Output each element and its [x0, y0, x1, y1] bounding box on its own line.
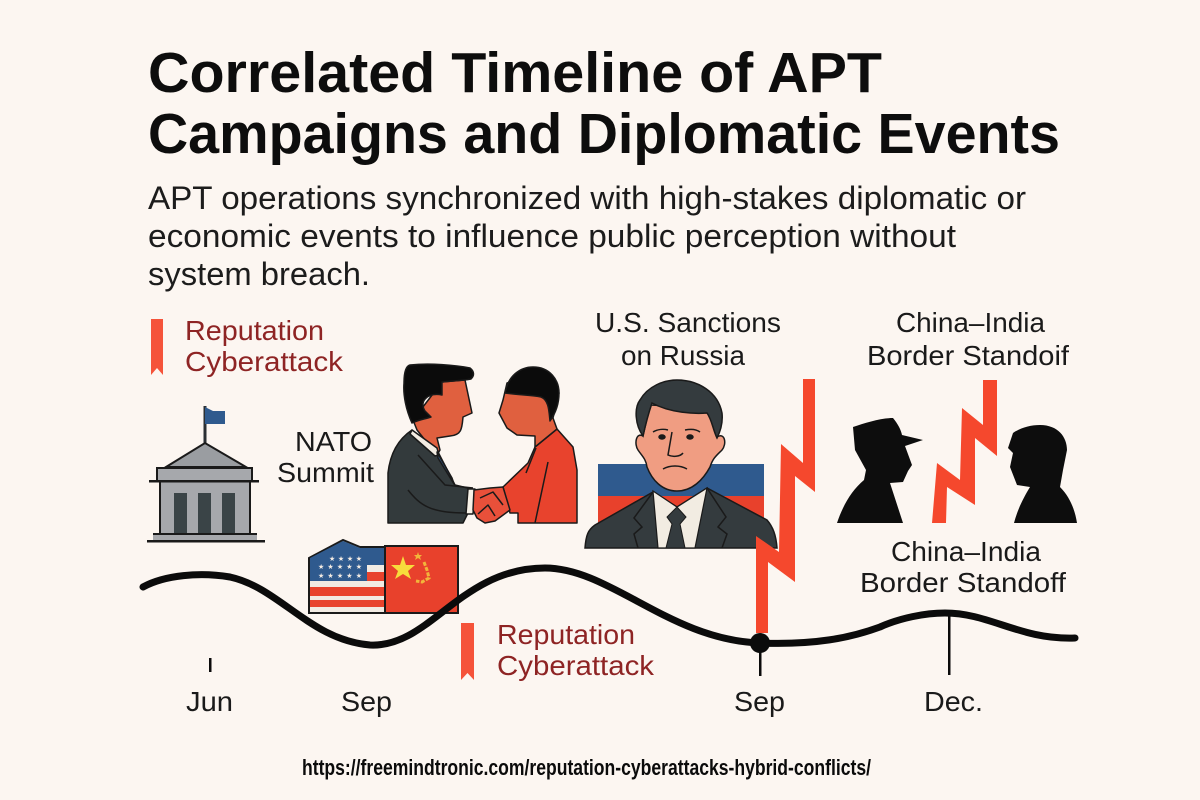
marker label: Reputation: [497, 619, 635, 650]
marker label: [497, 619, 655, 681]
hands: [473, 487, 510, 523]
left figure: [388, 364, 476, 523]
timeline month labels: [186, 686, 983, 717]
title: Campaigns and Diplomatic Events: [148, 102, 1060, 166]
label: China-India Border Standoff: Border Standoff: [860, 567, 1066, 598]
label: U.S. Sanctions on Russia: on Russia: [621, 340, 745, 371]
Russian flag: [598, 464, 764, 523]
subtitle: economic events to influence public perception without: [148, 218, 956, 254]
timeline month labels: Dec.: [924, 686, 983, 717]
icon: red ribbon: [151, 319, 163, 375]
icon: US and China flags: [309, 540, 458, 613]
legend: reputation cyberattack: [151, 315, 344, 377]
label: China-India Border Standoif: China–India: [896, 307, 1045, 338]
left soldier silhouette: [837, 418, 923, 523]
timeline markers: [209, 614, 950, 676]
marker label: Cyberattack: [497, 650, 655, 681]
US flag: ★ ★ ★ ★: [329, 555, 362, 563]
right soldier silhouette: [1008, 425, 1077, 523]
timeline month labels: Sep: [734, 686, 785, 717]
face: [636, 405, 725, 491]
icon: government building: [147, 406, 265, 542]
label: China-India Border Standoif: [867, 307, 1069, 371]
label: U.S. Sanctions on Russia: [595, 307, 781, 371]
source url: https://freemindtronic.com/reputation-cyberattacks-hybrid-conflicts/: [302, 755, 871, 780]
label: China-India Border Standoff: China–India: [891, 536, 1041, 567]
US flag: [309, 540, 385, 613]
timeline month labels: Jun: [186, 686, 233, 717]
subtitle: [148, 180, 1026, 292]
icon: red ribbon: [461, 623, 474, 680]
title: [148, 41, 1060, 166]
label: China-India Border Standoif: Border Standoif: [867, 340, 1069, 371]
China flag: [385, 546, 458, 613]
subtitle: APT operations synchronized with high-stakes diplomatic or: [148, 180, 1026, 216]
icon: handshake of two leaders: [388, 364, 577, 523]
legend label: Cyberattack: [185, 346, 344, 377]
label: China-India Border Standoff: [860, 536, 1066, 598]
label: U.S. Sanctions on Russia: U.S. Sanctions: [595, 307, 781, 338]
legend label: [185, 315, 344, 377]
timeline month labels: Sep: [341, 686, 392, 717]
US flag: ★ ★ ★ ★ ★: [318, 572, 362, 580]
suit: [585, 488, 777, 548]
label: NATO Summit: [277, 426, 374, 488]
label: NATO Summit: Summit: [277, 457, 374, 488]
spike: lightning at Russia sanctions: [756, 379, 815, 633]
icon: official in front of Russian flag: [585, 380, 777, 548]
hair: [636, 380, 722, 438]
US flag: ★ ★ ★ ★ ★: [318, 563, 362, 571]
title: Correlated Timeline of APT: [148, 41, 882, 105]
timeline curve: [143, 568, 1075, 645]
lightning between soldiers: [932, 380, 997, 523]
label: NATO Summit: NATO: [295, 426, 372, 457]
right figure: [499, 367, 577, 523]
icon: soldiers facing off: [837, 380, 1077, 523]
subtitle: system breach.: [148, 256, 370, 292]
legend label: Reputation: [185, 315, 324, 346]
facial features: [653, 429, 700, 469]
marker: reputation cyberattack on timeline: [461, 619, 655, 681]
